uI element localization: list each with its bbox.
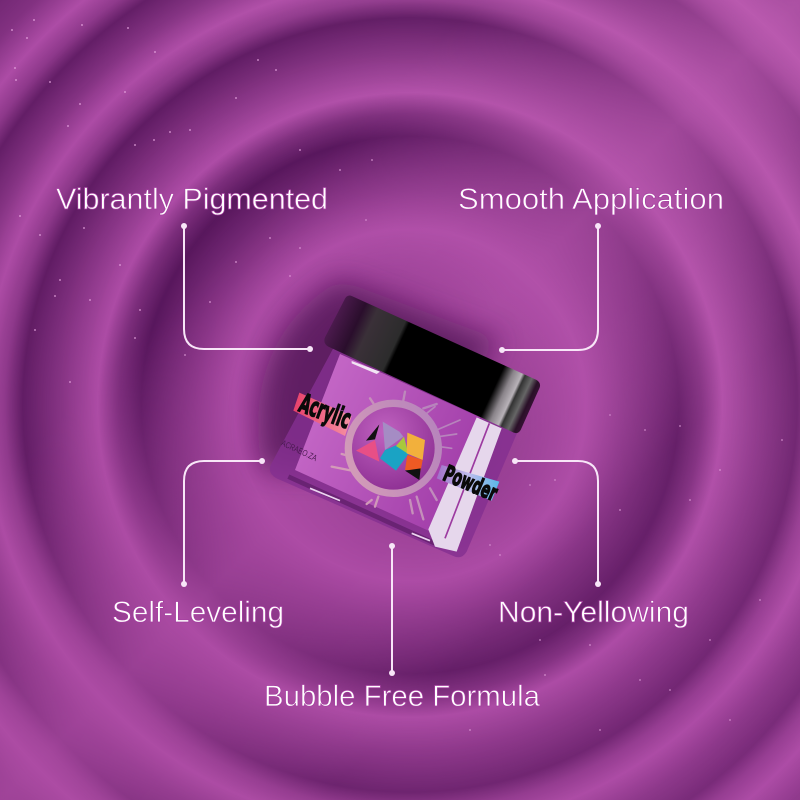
label: Powder <box>437 461 501 507</box>
logo triangles <box>356 422 425 480</box>
label: Vibrantly Pigmented: Vibrantly Pigmented <box>56 183 328 216</box>
connector: Non-Yellowing <box>512 458 601 587</box>
glass highlights <box>352 361 380 374</box>
product jar <box>270 296 540 557</box>
jar lid <box>324 296 540 433</box>
label: Powder: Powder <box>439 461 501 507</box>
connector: Bubble Free Formula <box>389 543 395 676</box>
label: Self-Leveling: Self-Leveling <box>112 596 284 629</box>
jar glass body <box>270 345 518 557</box>
label: Acrylic <box>293 388 355 436</box>
connector: Self-Leveling <box>181 458 265 587</box>
label: Bubble Free Formula: Bubble Free Formula <box>264 680 540 713</box>
label: Smooth Application: Smooth Application <box>458 183 724 216</box>
connector: Vibrantly Pigmented <box>181 223 313 352</box>
label: Non-Yellowing: Non-Yellowing <box>498 596 689 629</box>
label: Acrylic: Acrylic <box>295 388 355 435</box>
jar inner powder <box>295 354 480 531</box>
connector: Smooth Application <box>499 223 601 353</box>
white vertical stripes <box>428 417 502 552</box>
jar base glass lines <box>288 477 435 543</box>
small print: ACRAEO.ZA <box>280 438 319 463</box>
splash ring <box>332 392 460 519</box>
